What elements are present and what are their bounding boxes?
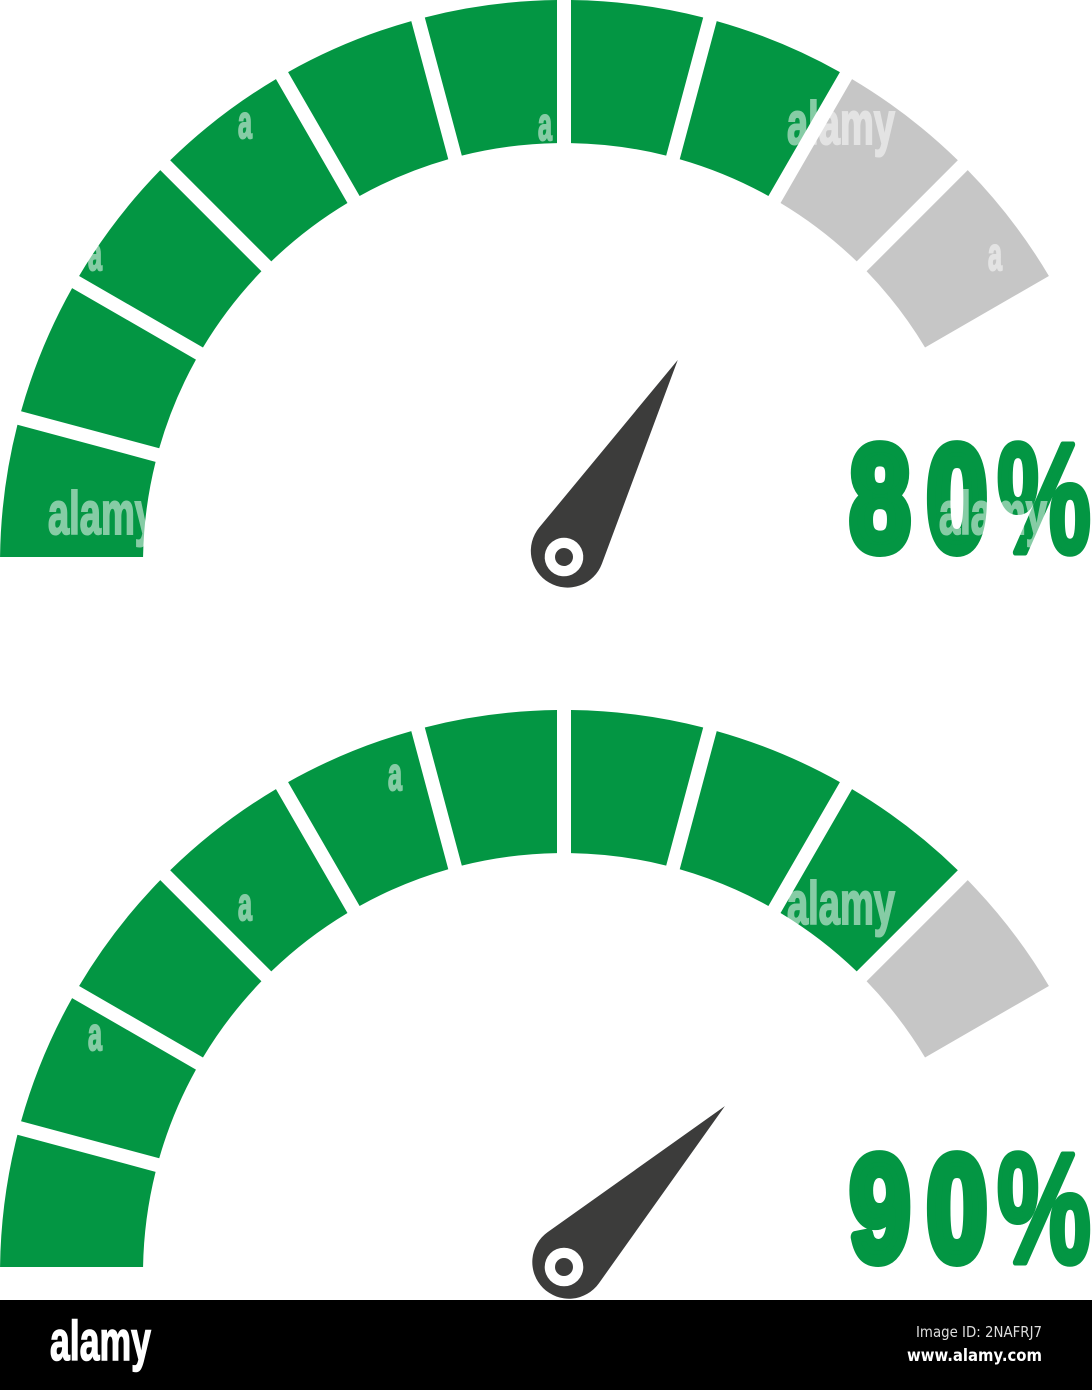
value label: 90%: 9: [850, 1126, 910, 1292]
panel: 90 percent gauge: [0, 706, 1091, 1314]
gauge arc: 80 percent segments: [0, 0, 1052, 576]
footer banner: [0, 1300, 1092, 1390]
value label: 90%: 0: [927, 1126, 987, 1292]
panel: 80 percent gauge: [0, 0, 1091, 601]
value label: 80%: [850, 412, 1091, 586]
gauge arc: 90 percent segments: [0, 706, 1052, 1286]
watermarks: a: [538, 98, 552, 150]
needle pointing to 90 percent: [517, 1080, 751, 1314]
website: www.alamy.com: [907, 1346, 1042, 1366]
needle pointing to 80 percent: [517, 342, 710, 601]
watermarks: alamy: [48, 480, 156, 547]
watermarks: alamy: [787, 90, 895, 157]
watermarks: a: [88, 228, 102, 280]
watermarks: a: [88, 1008, 102, 1060]
footer logo: alamy: [50, 1309, 151, 1372]
watermarks: [48, 90, 1047, 1060]
image id: Image ID: 2NAFRJ7: [916, 1323, 1042, 1341]
value label: 90%: [850, 1122, 1091, 1296]
value label: 80%: 8: [850, 416, 910, 582]
watermarks: a: [238, 878, 252, 930]
watermarks: a: [388, 748, 402, 800]
watermarks: a: [238, 96, 252, 148]
watermarks: alamy: [787, 870, 895, 937]
watermarks: a: [988, 228, 1002, 280]
value label: 80%: 0: [927, 416, 987, 582]
